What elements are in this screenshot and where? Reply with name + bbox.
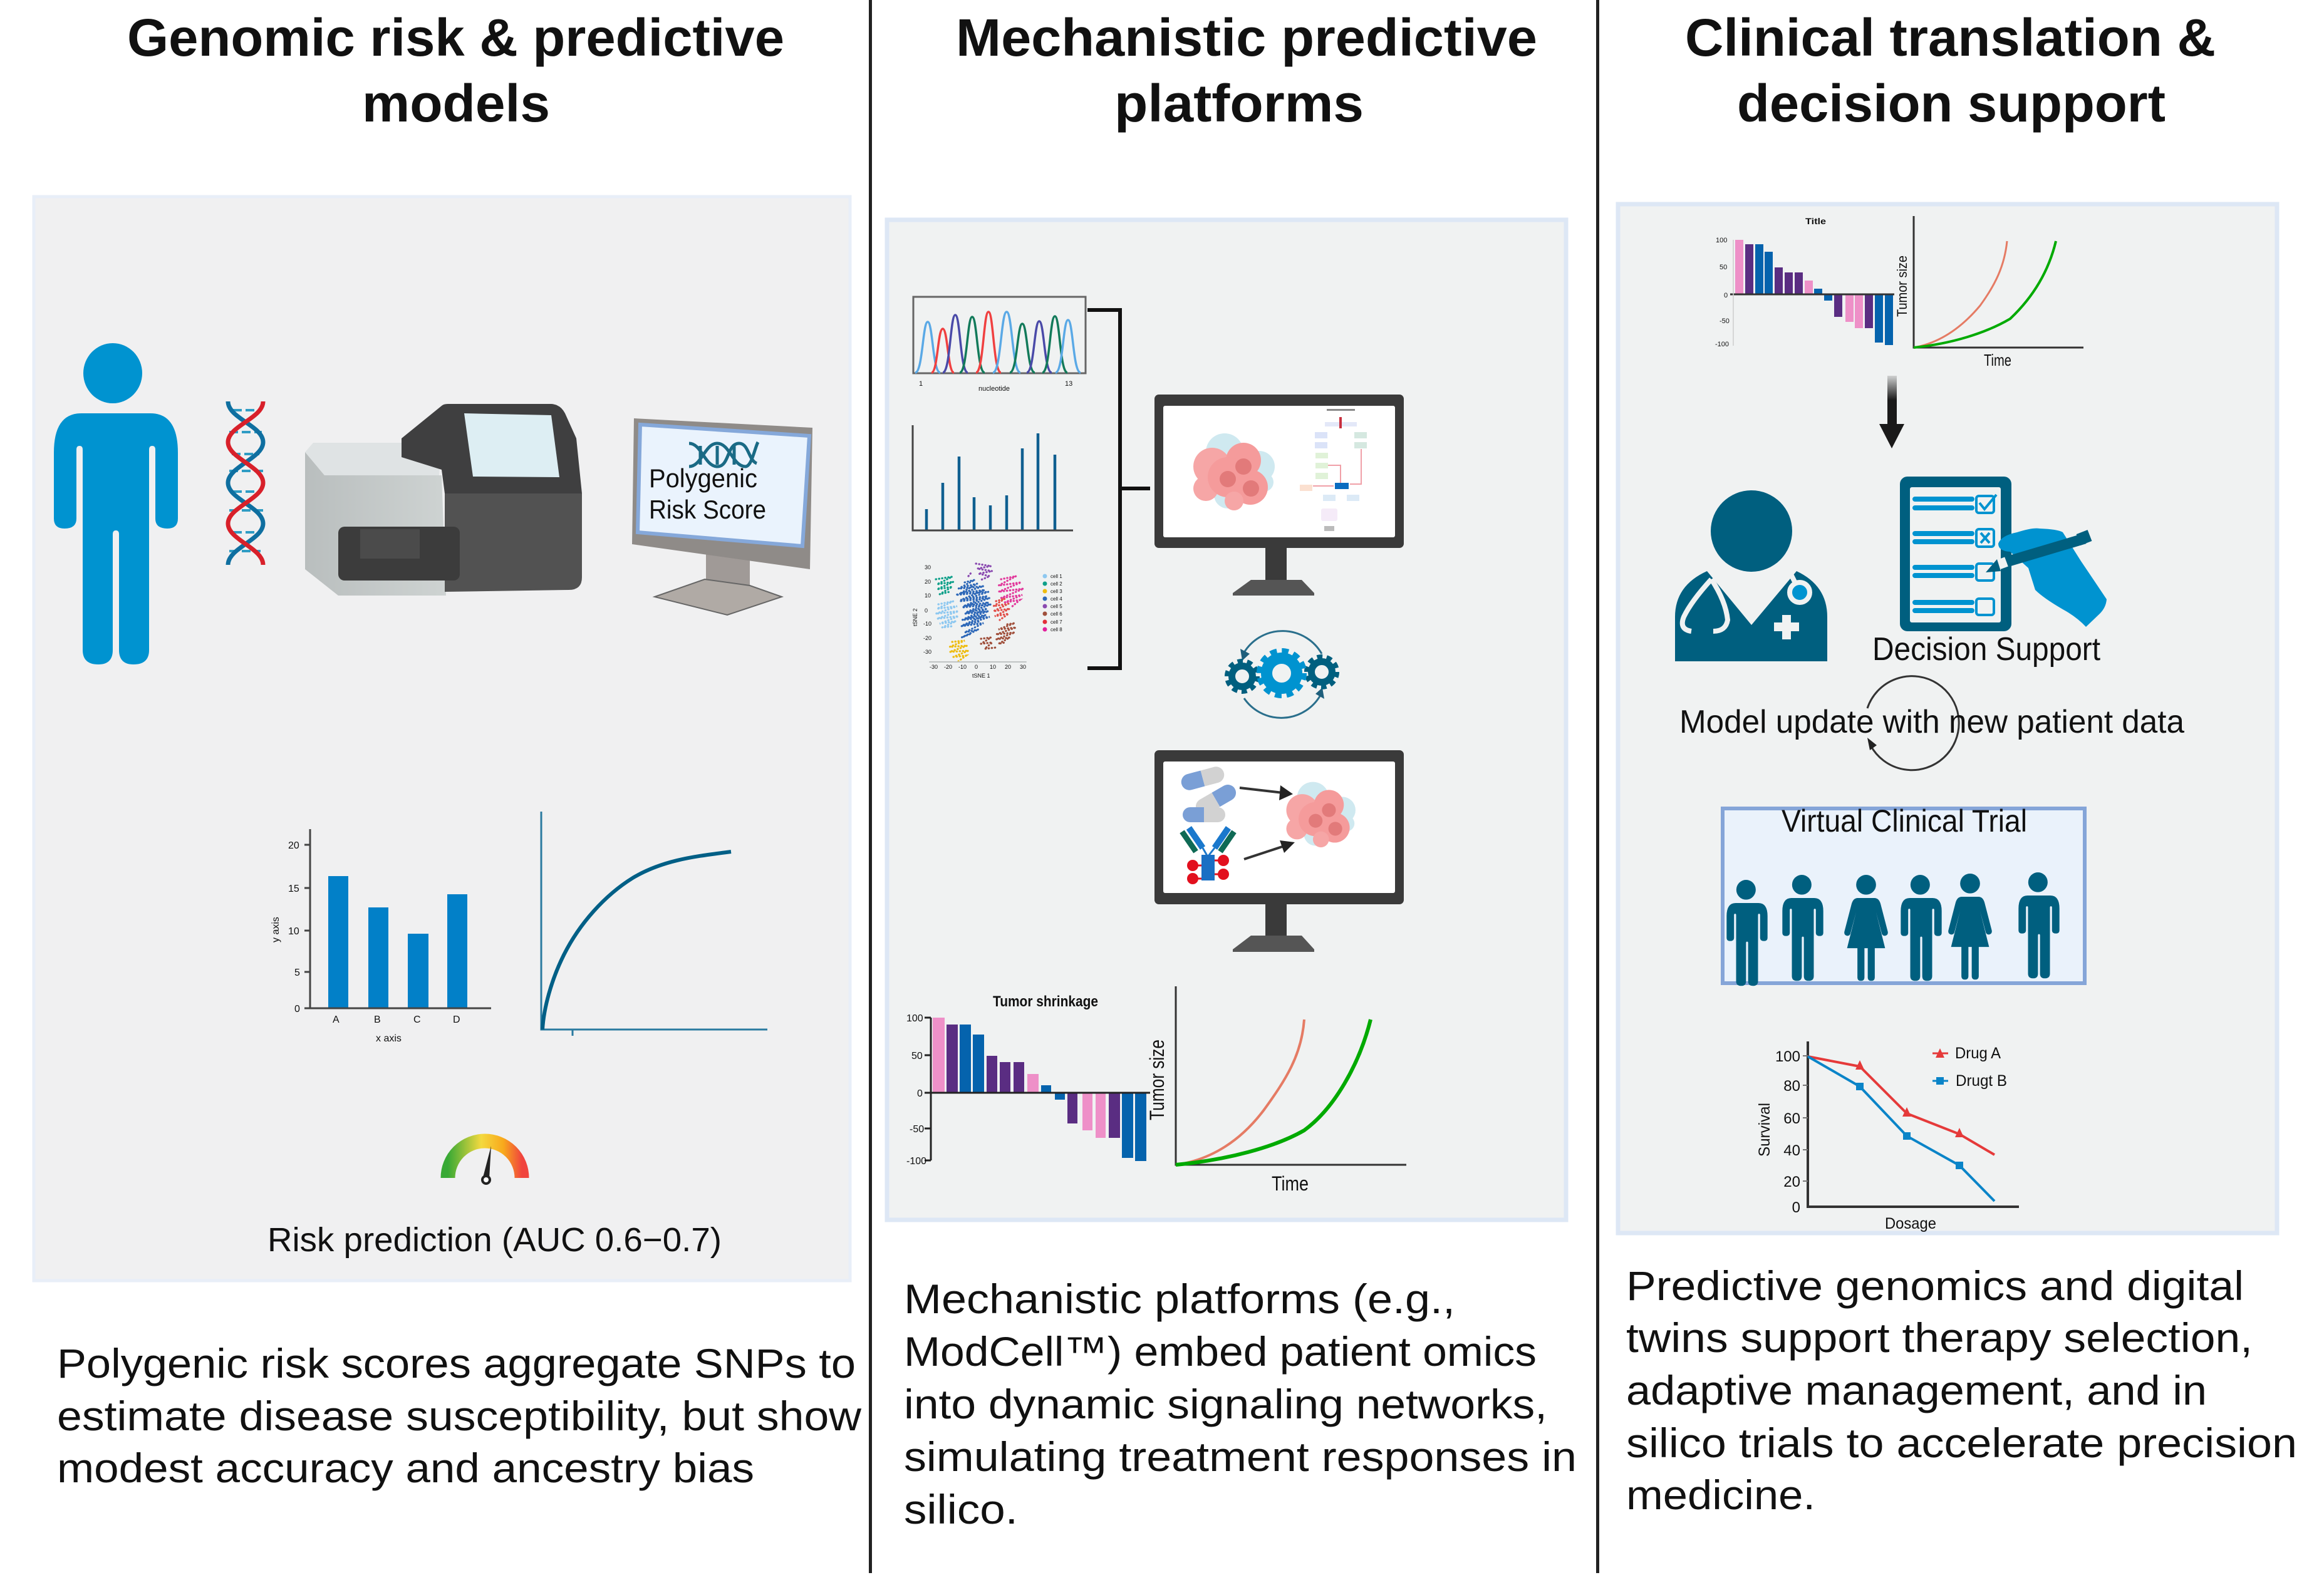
scatter legend: cell 1 — [1050, 574, 1062, 579]
pill 2 — [1193, 782, 1239, 818]
small waterfall chart — [1715, 216, 1894, 348]
arrow: antibody to tumor — [1244, 840, 1295, 859]
blue cluster — [956, 580, 991, 638]
screen — [1163, 406, 1395, 537]
scatter axis ticks: -20 — [944, 664, 952, 670]
model update cycle arrow — [1867, 676, 1959, 770]
neck — [1265, 902, 1287, 937]
base — [655, 579, 782, 615]
red cluster — [993, 599, 1010, 620]
pathway title — [1327, 409, 1355, 411]
axis labels: y axis — [271, 917, 281, 942]
chromatogram labels: 1 — [919, 380, 923, 388]
patient cohort — [1726, 872, 2060, 986]
column divider 1 — [869, 0, 872, 1573]
pen sleeve — [1995, 562, 2006, 566]
monitor label line 2: Risk Score — [649, 495, 766, 524]
clipboard — [1900, 477, 2011, 631]
x axis title: Dosage — [1885, 1215, 1936, 1232]
scatter axis ticks: 10 — [925, 592, 931, 599]
small waterfall tick labels: 0 — [1724, 292, 1728, 299]
pathway nodes — [1300, 432, 1367, 531]
trial frame — [1723, 808, 2085, 983]
survival tick labels: 80 — [1783, 1078, 1800, 1095]
chromatogram labels — [919, 380, 1072, 393]
doctor head — [1711, 490, 1792, 572]
saturation curve chart — [541, 812, 767, 1036]
small y axis title: Tumor size — [1894, 256, 1910, 317]
axis labels: 15 — [288, 884, 299, 894]
pill 1 — [1180, 765, 1226, 792]
icon: tumor cells — [1193, 433, 1275, 510]
scatter axis ticks: -10 — [923, 621, 931, 627]
light arms — [1182, 832, 1234, 852]
neck — [1265, 546, 1287, 581]
check and cross marks — [1979, 495, 1996, 543]
heavy arms — [1189, 828, 1228, 848]
scatter axis ticks: 0 — [925, 607, 928, 614]
scatter axis ticks — [912, 564, 1026, 679]
red strand — [228, 401, 263, 565]
scatter axis ticks: -20 — [923, 635, 931, 641]
checklist rows — [1915, 499, 1972, 611]
conjugated payload links — [1193, 860, 1223, 879]
sequencer upper dark body — [402, 404, 582, 493]
scatter axis ticks: 30 — [1020, 664, 1026, 670]
pen cap — [2078, 535, 2090, 540]
scatter plot — [912, 564, 1062, 679]
heading: genomic risk: models — [362, 74, 550, 133]
small waterfall tick labels: -50 — [1720, 317, 1730, 325]
waterfall tick labels: 0 — [917, 1088, 923, 1099]
axis labels: 10 — [288, 926, 299, 937]
icon: sequencer — [305, 404, 582, 596]
text block: mechanistic summary: silico. — [904, 1486, 1018, 1532]
teal cluster — [936, 577, 953, 594]
small growth chart — [1894, 216, 2083, 369]
small x axis title: Time — [1984, 351, 2011, 369]
heading: mechanistic platforms — [956, 8, 1537, 133]
icon: decision checklist — [1900, 477, 2107, 631]
chromatogram labels: 13 — [1065, 380, 1072, 388]
small waterfall tick labels: -100 — [1715, 341, 1729, 348]
scatter axis ticks: 10 — [990, 664, 996, 670]
waterfall tick labels — [906, 1013, 926, 1167]
blue strand — [228, 401, 263, 565]
bars — [328, 876, 467, 1008]
spike axes — [913, 425, 1073, 530]
scatter axis ticks: -30 — [930, 664, 938, 670]
survival tick labels: 40 — [1783, 1142, 1800, 1159]
legend line B — [1932, 1080, 1948, 1082]
stethoscope head — [1790, 582, 1810, 602]
survival tick labels: 60 — [1783, 1110, 1800, 1127]
scatter axis ticks: tSNE 1 — [972, 673, 990, 679]
drug B markers — [1856, 1077, 1963, 1169]
axis labels: D — [453, 1014, 460, 1025]
base — [1233, 580, 1314, 596]
text block: mechanistic summary: ModCell™) embed patient omics — [904, 1328, 1537, 1375]
text block: mechanistic summary — [904, 1276, 1577, 1532]
panel background — [34, 197, 850, 1281]
growth chart: tumor size over time — [1146, 986, 1406, 1195]
scatter axis ticks: 20 — [925, 579, 931, 585]
bezel — [1154, 750, 1404, 904]
sequencer lower dark body — [445, 493, 582, 592]
growth axes — [1176, 986, 1406, 1165]
scatter legend: cell 3 — [1050, 589, 1062, 594]
icon: gauge — [448, 1141, 522, 1184]
decision support label: Decision Support — [1872, 631, 2101, 668]
curve axes — [541, 812, 767, 1036]
chromatogram chart — [913, 297, 1086, 393]
drug B line — [1808, 1056, 1995, 1201]
small waterfall y axis — [1733, 240, 1734, 346]
cycle arrows — [1244, 631, 1322, 718]
needle pivot — [482, 1176, 490, 1184]
monitor: therapy simulation — [1154, 750, 1404, 952]
bracket connector — [1087, 310, 1150, 668]
text block: mechanistic summary: Mechanistic platforms (e.g., — [904, 1276, 1455, 1322]
waterfall tick labels: 50 — [911, 1051, 923, 1061]
waterfall chart: tumor shrinkage — [906, 993, 1150, 1167]
monitor: tumor and pathway model — [1154, 395, 1404, 596]
icon: rotating gears — [1227, 631, 1337, 718]
checkboxes — [1976, 496, 1994, 615]
pill 3 — [1183, 807, 1225, 822]
pen — [2009, 539, 2085, 561]
axis labels: 0 — [294, 1004, 300, 1014]
text block: clinical summary: Predictive genomics and digital — [1626, 1262, 2244, 1309]
model update label: Model update with new patient data — [1679, 704, 2184, 740]
x axis title: Time — [1272, 1172, 1309, 1195]
survival axes — [1808, 1041, 2019, 1207]
survival tick labels — [1775, 1048, 1800, 1216]
scatter axis ticks: 30 — [925, 564, 931, 570]
scatter legend: cell 5 — [1050, 604, 1062, 609]
text block: clinical summary: silico trials to accelerate precision — [1626, 1420, 2297, 1466]
purple cluster — [968, 564, 992, 580]
chromatogram frame — [913, 297, 1086, 373]
receptor — [1339, 417, 1342, 428]
sequencer drawer — [338, 527, 460, 581]
axis labels: C — [413, 1014, 421, 1025]
survival tick labels: 20 — [1783, 1174, 1800, 1190]
y axis title: Survival — [1756, 1103, 1773, 1157]
screen — [638, 425, 809, 546]
survival line chart — [1756, 1041, 2019, 1232]
frame — [632, 418, 812, 569]
waterfall tick labels: -50 — [910, 1124, 924, 1135]
receptor band — [1325, 422, 1357, 426]
sequencer screen — [464, 413, 559, 477]
waterfall tick labels: 100 — [906, 1013, 923, 1024]
yellow cluster — [950, 641, 968, 661]
right gear — [1307, 657, 1337, 687]
scatter axis ticks: 0 — [975, 664, 978, 670]
heading: clinical translation: Clinical translation & — [1685, 8, 2216, 67]
small waterfall tick labels: 100 — [1716, 237, 1727, 244]
legend drug A: Drug A — [1955, 1045, 2001, 1062]
waterfall axes — [925, 1018, 1150, 1160]
conjugated payloads — [1187, 855, 1229, 884]
arrow: pills to tumor — [1240, 785, 1293, 800]
light blue cluster — [936, 601, 958, 627]
bar chart — [271, 829, 491, 1044]
medical cross — [1774, 615, 1799, 639]
small waterfall bars — [1735, 240, 1893, 345]
scatter legend: cell 4 — [1050, 596, 1062, 602]
treated curve — [1176, 1020, 1304, 1165]
sequencer top face — [305, 443, 442, 475]
heading: genomic risk: Genomic risk & predictive — [127, 8, 784, 67]
legend lines — [1932, 1052, 1948, 1055]
scatter legend: cell 8 — [1050, 627, 1062, 632]
axes — [304, 829, 491, 1008]
text block: clinical summary: adaptive management, and in — [1626, 1367, 2207, 1413]
icon: antibody — [1182, 828, 1234, 884]
axis labels: 5 — [294, 968, 300, 978]
scatter legend: cell 2 — [1050, 581, 1062, 587]
gauge arc — [448, 1141, 522, 1178]
small waterfall axes — [1730, 293, 1894, 296]
column divider 2 — [1596, 0, 1599, 1573]
scatter legend — [1042, 574, 1062, 632]
survival tick labels: 100 — [1775, 1048, 1800, 1065]
peaks — [915, 312, 1081, 373]
panel: genomic risk — [34, 197, 850, 1281]
text block: clinical summary — [1626, 1262, 2297, 1518]
waterfall bars — [933, 1018, 1146, 1161]
survival tick labels: 0 — [1792, 1199, 1800, 1216]
heading: mechanistic platforms: platforms — [1114, 74, 1364, 133]
drug A line — [1808, 1056, 1995, 1155]
drug A markers — [1855, 1048, 1964, 1137]
cycle arrowheads — [1240, 649, 1324, 699]
arrow: down — [1879, 376, 1904, 448]
clipboard sheet — [1910, 487, 2001, 622]
survival ticks — [1803, 1056, 1808, 1181]
pen tip — [1986, 559, 2001, 572]
pathway diagram — [1300, 409, 1367, 531]
drawer inner — [360, 529, 420, 559]
waterfall tick labels: -100 — [906, 1156, 926, 1167]
small growth axes — [1914, 216, 2083, 348]
text block: polygenic risk summary: Polygenic risk scores aggregate SNPs to — [57, 1340, 856, 1386]
trial label: Virtual Clinical Trial — [1782, 803, 2027, 839]
stethoscope — [1683, 576, 1797, 631]
icon: monitor with polygenic risk score — [632, 418, 812, 615]
monitor label: Polygenic — [649, 463, 757, 493]
heading: mechanistic platforms: Mechanistic predictive — [956, 8, 1537, 67]
icon: DNA helix — [228, 401, 263, 565]
axis labels: x axis — [376, 1033, 402, 1044]
curve — [542, 852, 731, 1030]
DNA logo — [689, 442, 758, 467]
small treated curve — [1914, 241, 2007, 348]
virtual clinical trial box — [1723, 803, 2085, 986]
gauge needle — [483, 1146, 491, 1179]
center gear — [1260, 651, 1304, 695]
axis labels — [271, 840, 460, 1044]
hinge — [1203, 848, 1215, 857]
text block: mechanistic summary: simulating treatment responses in — [904, 1433, 1577, 1480]
icon: tumor cells — [1286, 782, 1356, 847]
panel background — [1618, 204, 2277, 1233]
pink cluster — [999, 576, 1024, 607]
pathway links — [1313, 449, 1361, 486]
small waterfall tick labels: 50 — [1720, 264, 1727, 271]
scatter axis ticks: tSNE 2 — [912, 608, 918, 626]
scatter legend: cell 6 — [1050, 611, 1062, 617]
small waterfall title: Title — [1805, 216, 1826, 226]
y axis title: Tumor size — [1146, 1040, 1168, 1120]
heading: genomic risk — [127, 8, 784, 133]
scatter axis ticks: -10 — [958, 664, 967, 670]
heading: clinical translation — [1685, 8, 2216, 133]
panel: mechanistic platforms — [887, 204, 2297, 1532]
text block: clinical summary: medicine. — [1626, 1472, 1815, 1518]
brown cluster — [981, 623, 1016, 649]
helix rungs — [229, 410, 263, 551]
small control curve — [1914, 241, 2056, 348]
waterfall title: Tumor shrinkage — [993, 993, 1098, 1010]
sequencer front — [305, 452, 446, 596]
bezel — [1154, 395, 1404, 548]
small waterfall tick labels — [1715, 237, 1730, 348]
axis labels: B — [374, 1014, 381, 1025]
writing hand — [1998, 529, 2107, 627]
spike chart — [913, 425, 1073, 530]
text block: mechanistic summary: into dynamic signaling networks, — [904, 1381, 1547, 1427]
risk prediction label: Risk prediction (AUC 0.6−0.7) — [267, 1221, 722, 1259]
text block: polygenic risk summary — [57, 1340, 861, 1491]
heading: clinical translation: decision support — [1737, 74, 2166, 133]
legend drug B: Drugt B — [1956, 1072, 2007, 1090]
icon: doctor — [1675, 490, 1827, 661]
left gear — [1227, 661, 1257, 691]
text block: polygenic risk summary: modest accuracy and ancestry bias — [57, 1445, 754, 1491]
doctor body — [1675, 571, 1827, 661]
scatter axis ticks: 20 — [1005, 664, 1011, 670]
spikes — [926, 433, 1055, 530]
text block: polygenic risk summary: estimate disease susceptibility, but show — [57, 1393, 861, 1439]
scatter x axis — [930, 661, 1026, 663]
panel: clinical translation — [1618, 204, 2277, 1233]
control curve — [1176, 1020, 1371, 1165]
scatter legend: cell 7 — [1050, 619, 1062, 625]
panel background — [887, 220, 1566, 1220]
axis labels: 20 — [288, 840, 299, 851]
chromatogram labels: nucleotide — [978, 385, 1010, 393]
stand — [706, 551, 750, 590]
stem — [1201, 855, 1215, 880]
text block: clinical summary: twins support therapy selection, — [1626, 1314, 2253, 1361]
scatter axis ticks: -30 — [923, 649, 931, 655]
screen — [1163, 761, 1395, 893]
icon: person — [54, 343, 178, 664]
base — [1233, 936, 1314, 952]
axis labels: A — [333, 1014, 340, 1025]
